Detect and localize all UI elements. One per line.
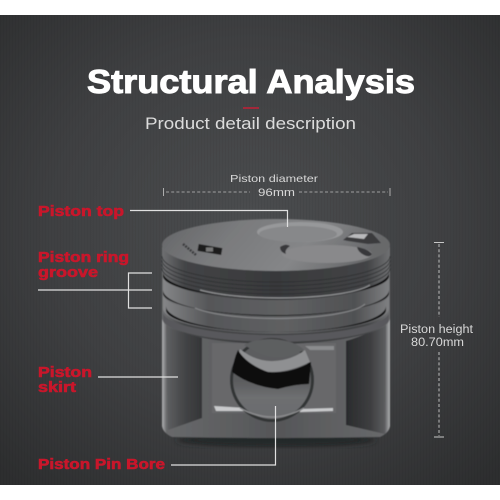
subtitle: Product detail description: [145, 114, 356, 133]
valve recess: [257, 222, 343, 242]
piston crown side: [162, 247, 390, 344]
label: piston skirt: Piston: [38, 365, 92, 381]
red accent bar: [243, 107, 259, 109]
pin boss: [212, 343, 336, 413]
boss highlights: [214, 406, 333, 412]
boss top edge: [305, 346, 334, 350]
leader: ring groove: [38, 273, 152, 308]
pin bore: [230, 338, 314, 422]
bore pin face: [244, 339, 304, 358]
leader: piston top: [130, 210, 288, 227]
leader: pin bore: [171, 406, 276, 465]
piston diameter dimension: Piston diameter: [230, 173, 319, 185]
label: piston ring groove: groove: [38, 265, 98, 281]
piston diameter dimension: [164, 173, 390, 199]
stamped text: [183, 244, 196, 255]
ring land 2 highlight: [195, 304, 365, 318]
groove 3: [166, 306, 386, 332]
label: piston ring groove: Piston ring: [38, 250, 129, 266]
groove 1: [163, 272, 389, 298]
valve mark: [343, 233, 381, 244]
piston illustration: [162, 219, 390, 447]
label: piston pin bore: Piston Pin Bore: [38, 457, 165, 473]
skirt left window: [166, 320, 202, 430]
label: piston skirt: skirt: [38, 380, 76, 396]
ring land 1: [163, 274, 389, 318]
skirt right window: [346, 322, 386, 434]
lower lip: [163, 312, 389, 342]
groove 2: [163, 290, 389, 316]
piston height dimension: Piston height: [400, 324, 474, 336]
bore lower rim: [240, 408, 304, 417]
stamped logo: [197, 244, 222, 255]
label: piston top: Piston top: [38, 204, 124, 220]
crown top ellipse: [162, 219, 390, 271]
title: Structural Analysis: [87, 63, 415, 100]
piston diameter dimension: 96mm: [258, 187, 295, 199]
ground shadow: [176, 433, 376, 447]
small notches: [280, 245, 372, 256]
top land fine rings: [162, 256, 390, 294]
bore dark reflection: [232, 350, 311, 389]
piston height dimension: [400, 242, 474, 437]
ring land 1 highlight: [200, 285, 370, 298]
ring land 2: [163, 294, 389, 334]
piston height dimension: 80.70mm: [411, 337, 464, 349]
centre bowl: [282, 245, 372, 263]
skirt body: [162, 312, 390, 438]
leader: skirt: [98, 376, 178, 378]
